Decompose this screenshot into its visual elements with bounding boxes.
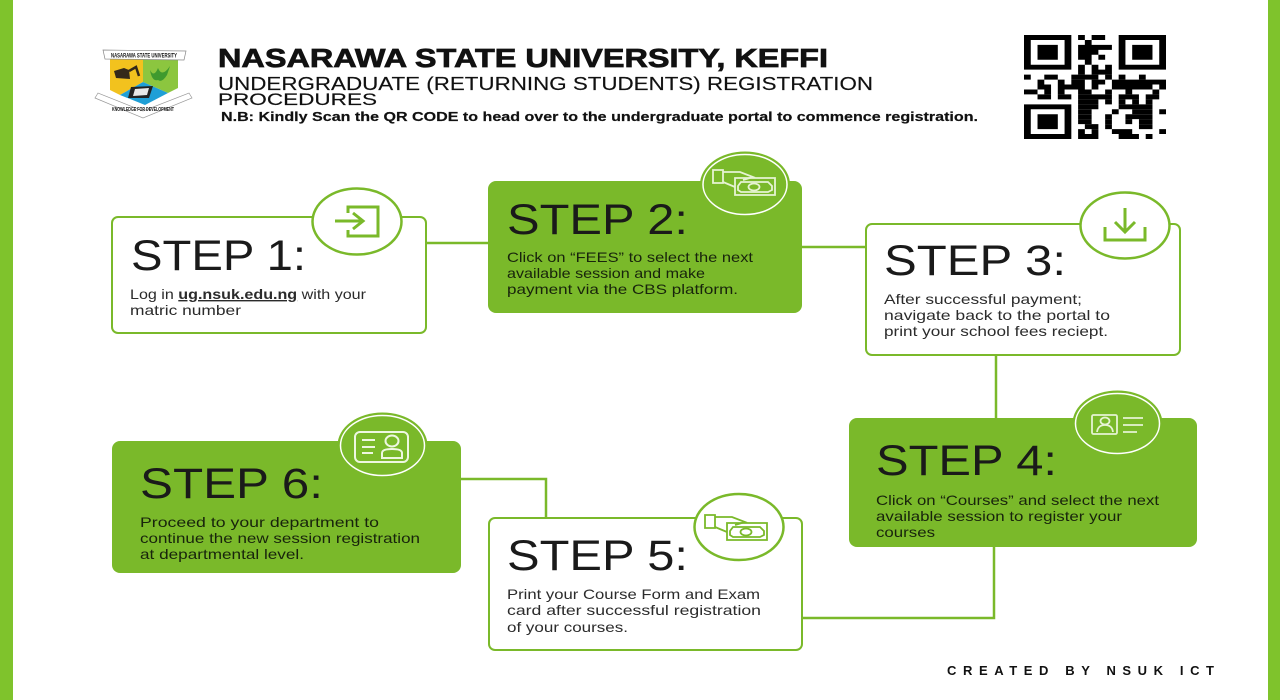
heading: step 6: STEP 6:: [140, 460, 323, 508]
connector: step 2 to step 3: [802, 246, 866, 248]
text: step 4 description: available session to register your: [876, 508, 1122, 524]
right green border: [1268, 0, 1280, 700]
icon: university crest logo: KNOWLEDGE FOR DEVELOPMENT: [112, 107, 174, 113]
heading: step 5: STEP 5:: [507, 532, 688, 580]
text: step 5 description: of your courses.: [507, 619, 628, 635]
text: step 2 description: Click on “FEES” to select the next: [507, 249, 753, 265]
heading: step 3: STEP 3:: [884, 237, 1066, 285]
icon: payment: [700, 152, 790, 218]
text: step 2 description: available session and make: [507, 265, 705, 281]
QR code: [1024, 35, 1166, 139]
text: step 4 description: Click on “Courses” and select the next: [876, 492, 1159, 508]
text: step 1 description: Log in ug.nsuk.edu.ng with your: [130, 286, 366, 302]
text: step 5 description: card after successful registration: [507, 602, 761, 618]
text: step 1 description: [130, 286, 366, 318]
heading: step 2: STEP 2:: [507, 196, 688, 244]
panel: step 2: [488, 152, 802, 313]
panel: step 5: [489, 494, 802, 650]
icon: payment outline: [694, 494, 784, 560]
text: step 2 description: [507, 249, 753, 297]
panel: step 6: [112, 412, 461, 573]
title: NASARAWA STATE UNIVERSITY, KEFFI: [218, 45, 828, 73]
text: step 5 description: [507, 586, 761, 635]
icon: university crest logo: [95, 50, 192, 118]
panel: step 4: [849, 390, 1197, 547]
subtitle: [218, 74, 873, 109]
text: step 6 description: [140, 514, 420, 562]
panel: step 3: [866, 192, 1180, 355]
heading: step 4: STEP 4:: [876, 437, 1057, 485]
left green border: [0, 0, 13, 700]
text: step 1 description: matric number: [130, 302, 241, 318]
text: step 3 description: After successful payment;: [884, 291, 1082, 307]
connector: step 3 to step 4: [995, 355, 997, 418]
connector: step 1 to step 2: [426, 242, 489, 244]
subtitle: PROCEDURES: [218, 91, 377, 109]
subtitle: UNDERGRADUATE (RETURNING STUDENTS) REGISTRATION: [218, 74, 873, 94]
icon: log in: [312, 188, 402, 254]
note: N.B: Kindly Scan the QR CODE to head over to the undergraduate portal to commence registration.: [221, 110, 978, 124]
text: step 6 description: continue the new session registration: [140, 530, 420, 546]
text: step 2 description: payment via the CBS platform.: [507, 281, 738, 297]
connector: step 4 to step 5: [802, 547, 994, 618]
icon: university crest logo: NASARAWA STATE UNIVERSITY: [111, 54, 177, 60]
text: step 6 description: at departmental level.: [140, 546, 304, 562]
icon: id card: [338, 412, 428, 478]
icon: profile list: [1072, 390, 1162, 456]
text: step 5 description: Print your Course Form and Exam: [507, 586, 760, 602]
connector: step 5 to step 6: [461, 479, 546, 518]
text: step 3 description: navigate back to the portal to: [884, 307, 1110, 323]
footer credit: CREATED BY NSUK ICT: [947, 663, 1214, 678]
panel: step 1: [112, 188, 426, 333]
text: step 4 description: courses: [876, 524, 935, 540]
text: step 3 description: [884, 291, 1110, 339]
text: step 6 description: Proceed to your department to: [140, 514, 379, 530]
text: step 3 description: print your school fees reciept.: [884, 323, 1108, 339]
heading: step 1: STEP 1:: [131, 232, 306, 280]
text: step 4 description: [876, 492, 1159, 540]
icon: download: [1080, 192, 1170, 258]
